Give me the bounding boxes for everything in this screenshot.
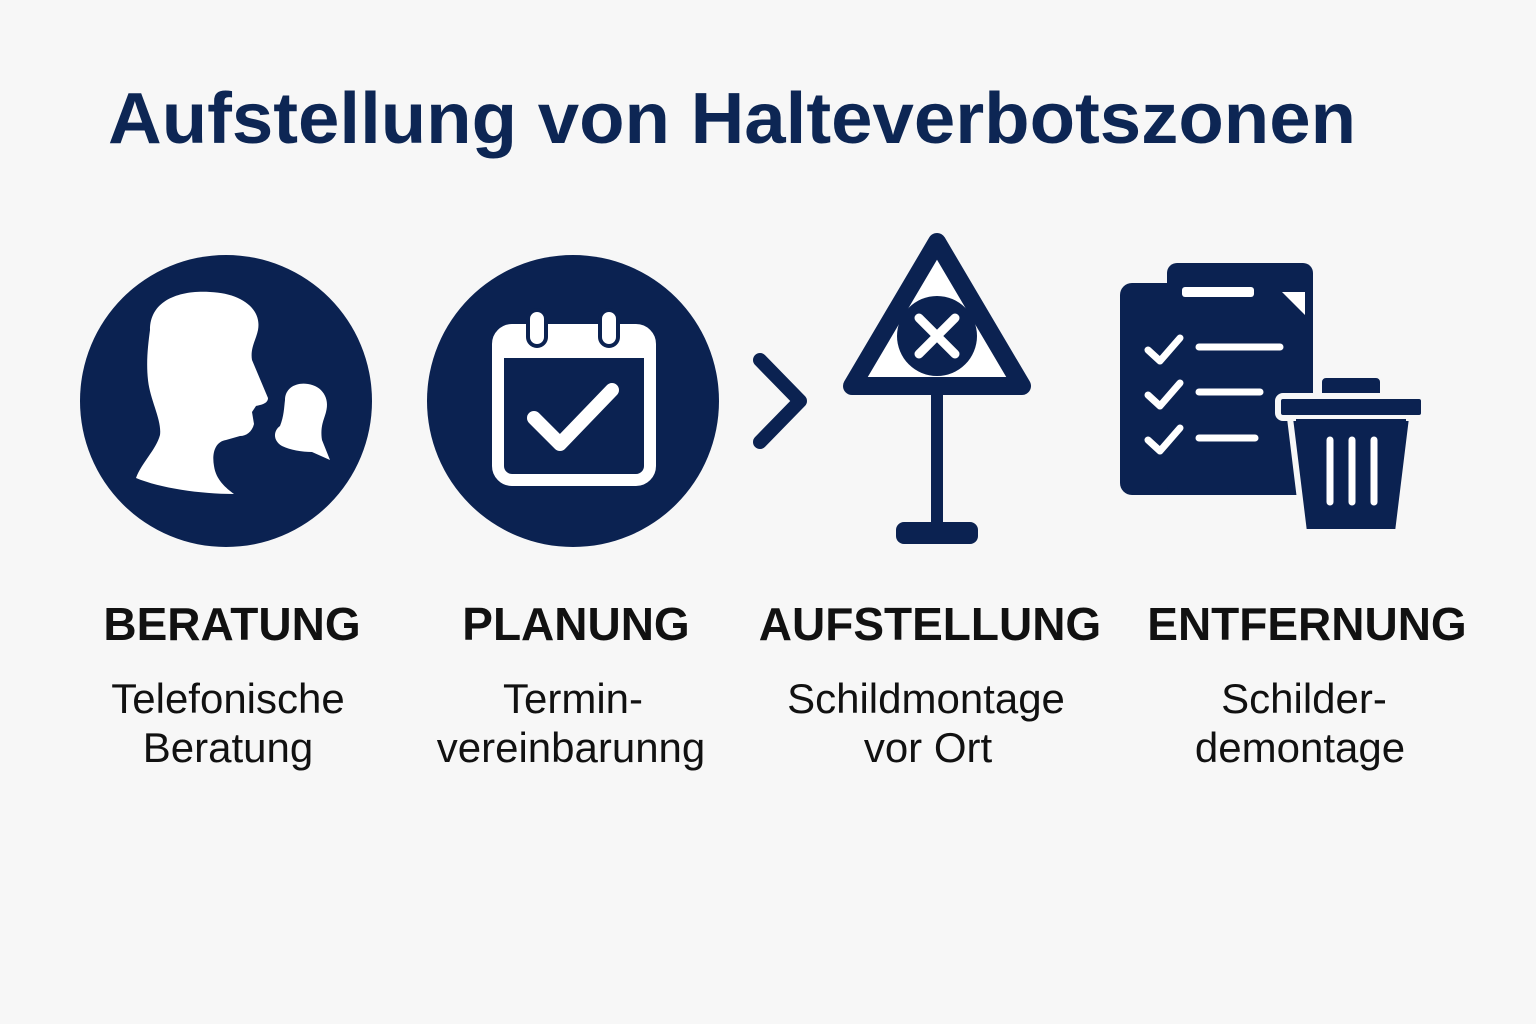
icon: checklist and trash [1120,263,1424,532]
step 2 text [437,598,705,771]
step 2 text: vereinbarunng [437,724,705,771]
icon: calendar [427,255,719,547]
icon: consultation head [80,255,372,547]
icon: no-stopping sign [852,242,1022,544]
step 3 text: AUFSTELLUNG [759,598,1101,650]
step 4 text [1147,598,1467,771]
step 3 text [759,598,1101,771]
step 1 text: Beratung [143,724,313,771]
step 3 text: Schildmontage [787,675,1065,722]
step 4 text: Schilder- [1221,675,1387,722]
arrow: chevron [760,360,800,442]
step 2 text: PLANUNG [462,598,690,650]
step 1 text: BERATUNG [103,598,361,650]
step 2 text: Termin- [503,675,643,722]
step 4 text: ENTFERNUNG [1147,598,1467,650]
title: Aufstellung von Halteverbotszonen [108,79,1356,159]
step 1 text [103,598,361,771]
step 4 text: demontage [1195,724,1405,771]
step 1 text: Telefonische [111,675,345,722]
step 3 text: vor Ort [864,724,992,771]
